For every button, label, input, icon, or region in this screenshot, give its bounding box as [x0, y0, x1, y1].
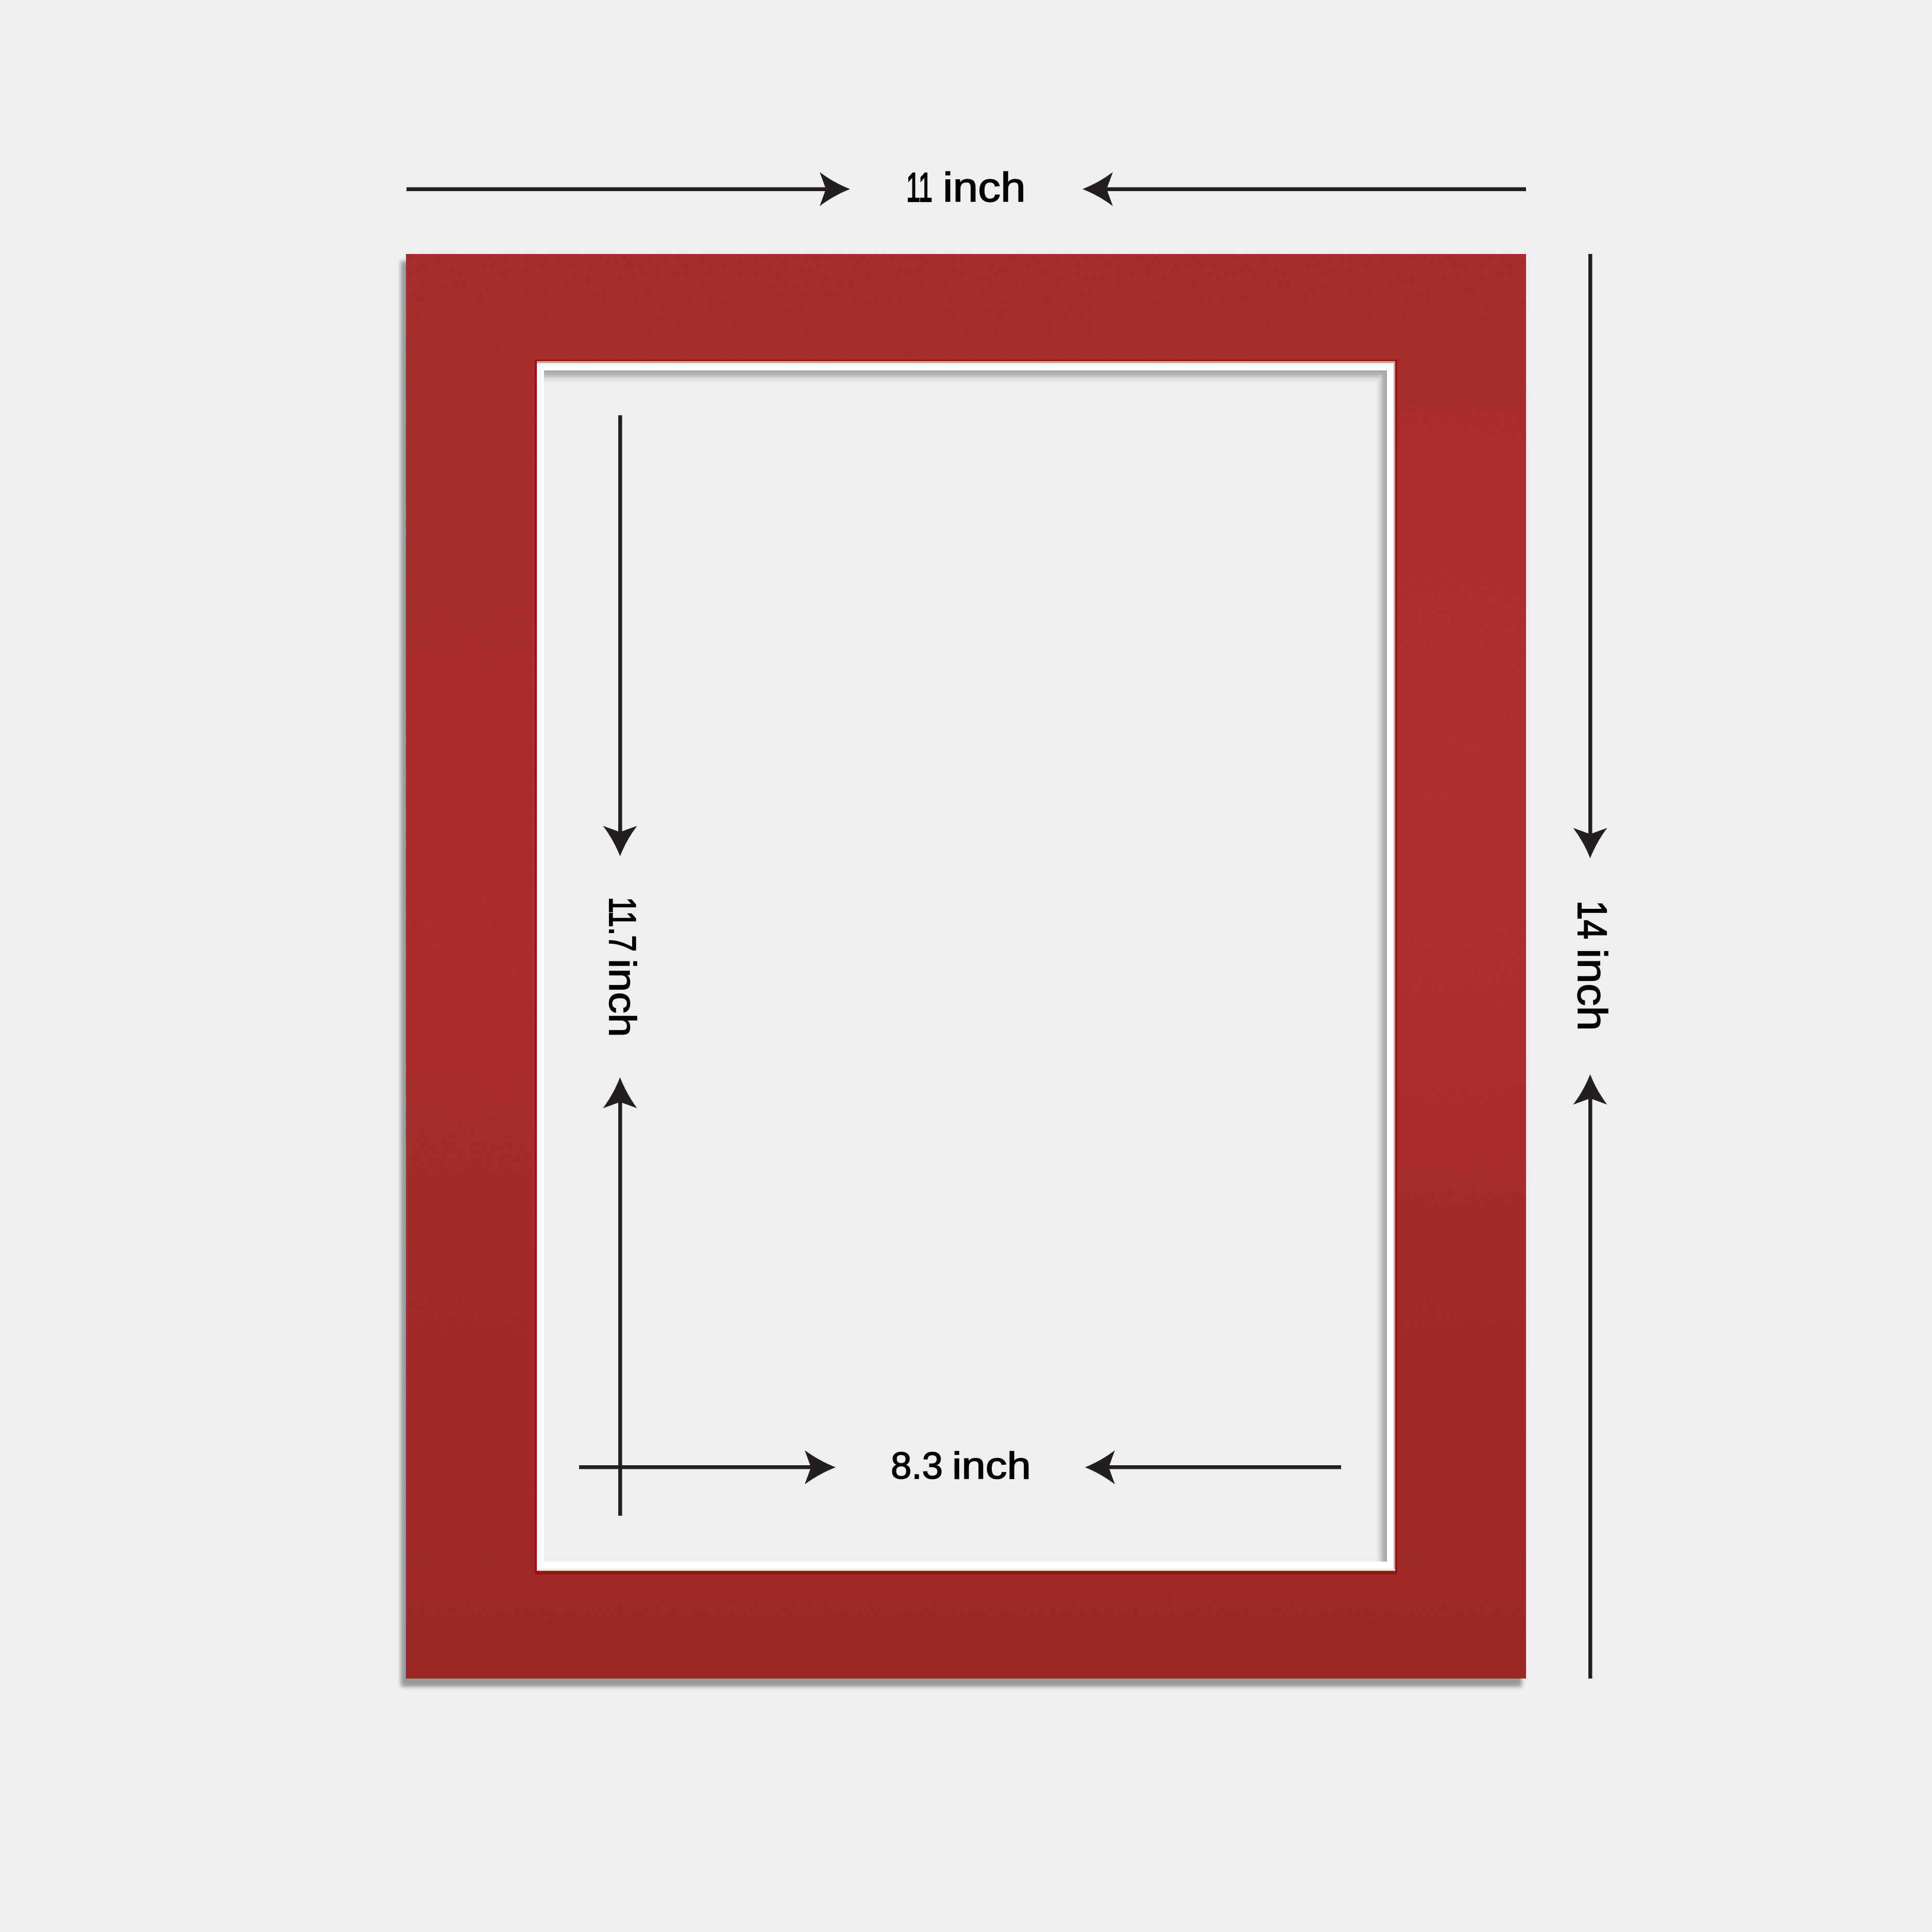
dimension: outer width 11 inch — [406, 164, 1526, 210]
mat board frame — [401, 254, 1526, 1687]
mat highlight — [406, 254, 1526, 1679]
label: 8.3 — [891, 1445, 943, 1487]
label: inch — [601, 959, 643, 1037]
mat paper texture — [406, 254, 1526, 1679]
bevel dark edge — [535, 360, 1397, 1574]
inner backing — [544, 370, 1387, 1562]
dimension: window height 11.7 inch — [601, 415, 643, 1516]
right arrow — [1082, 172, 1526, 206]
bottom arrow — [1573, 1074, 1607, 1679]
label: 11.7 — [601, 897, 643, 952]
inner right shadow — [1376, 370, 1387, 1562]
label: 14 — [1569, 901, 1615, 939]
left arrow — [406, 172, 850, 206]
left arrow — [579, 1450, 836, 1484]
top arrow — [1573, 254, 1607, 858]
white bevel — [537, 361, 1395, 1571]
label: inch — [1569, 948, 1615, 1031]
label: inch — [943, 164, 1026, 210]
inner top shadow — [544, 370, 1387, 383]
bevel pink right edge — [1394, 361, 1395, 1571]
top arrow — [603, 415, 637, 856]
bottom arrow — [603, 1077, 637, 1516]
label: inch — [952, 1445, 1031, 1487]
dimension: window width 8.3 inch — [579, 1445, 1341, 1487]
bevel pink top edge — [537, 361, 1395, 363]
bevel pink bottom edge — [537, 1569, 1395, 1571]
label: 11 — [906, 164, 933, 210]
red mat board — [406, 254, 1526, 1679]
window opening — [537, 361, 1395, 1571]
right arrow — [1085, 1450, 1341, 1484]
frame drop shadow — [401, 261, 1522, 1687]
dimension: outer height 14 inch — [1569, 254, 1615, 1679]
